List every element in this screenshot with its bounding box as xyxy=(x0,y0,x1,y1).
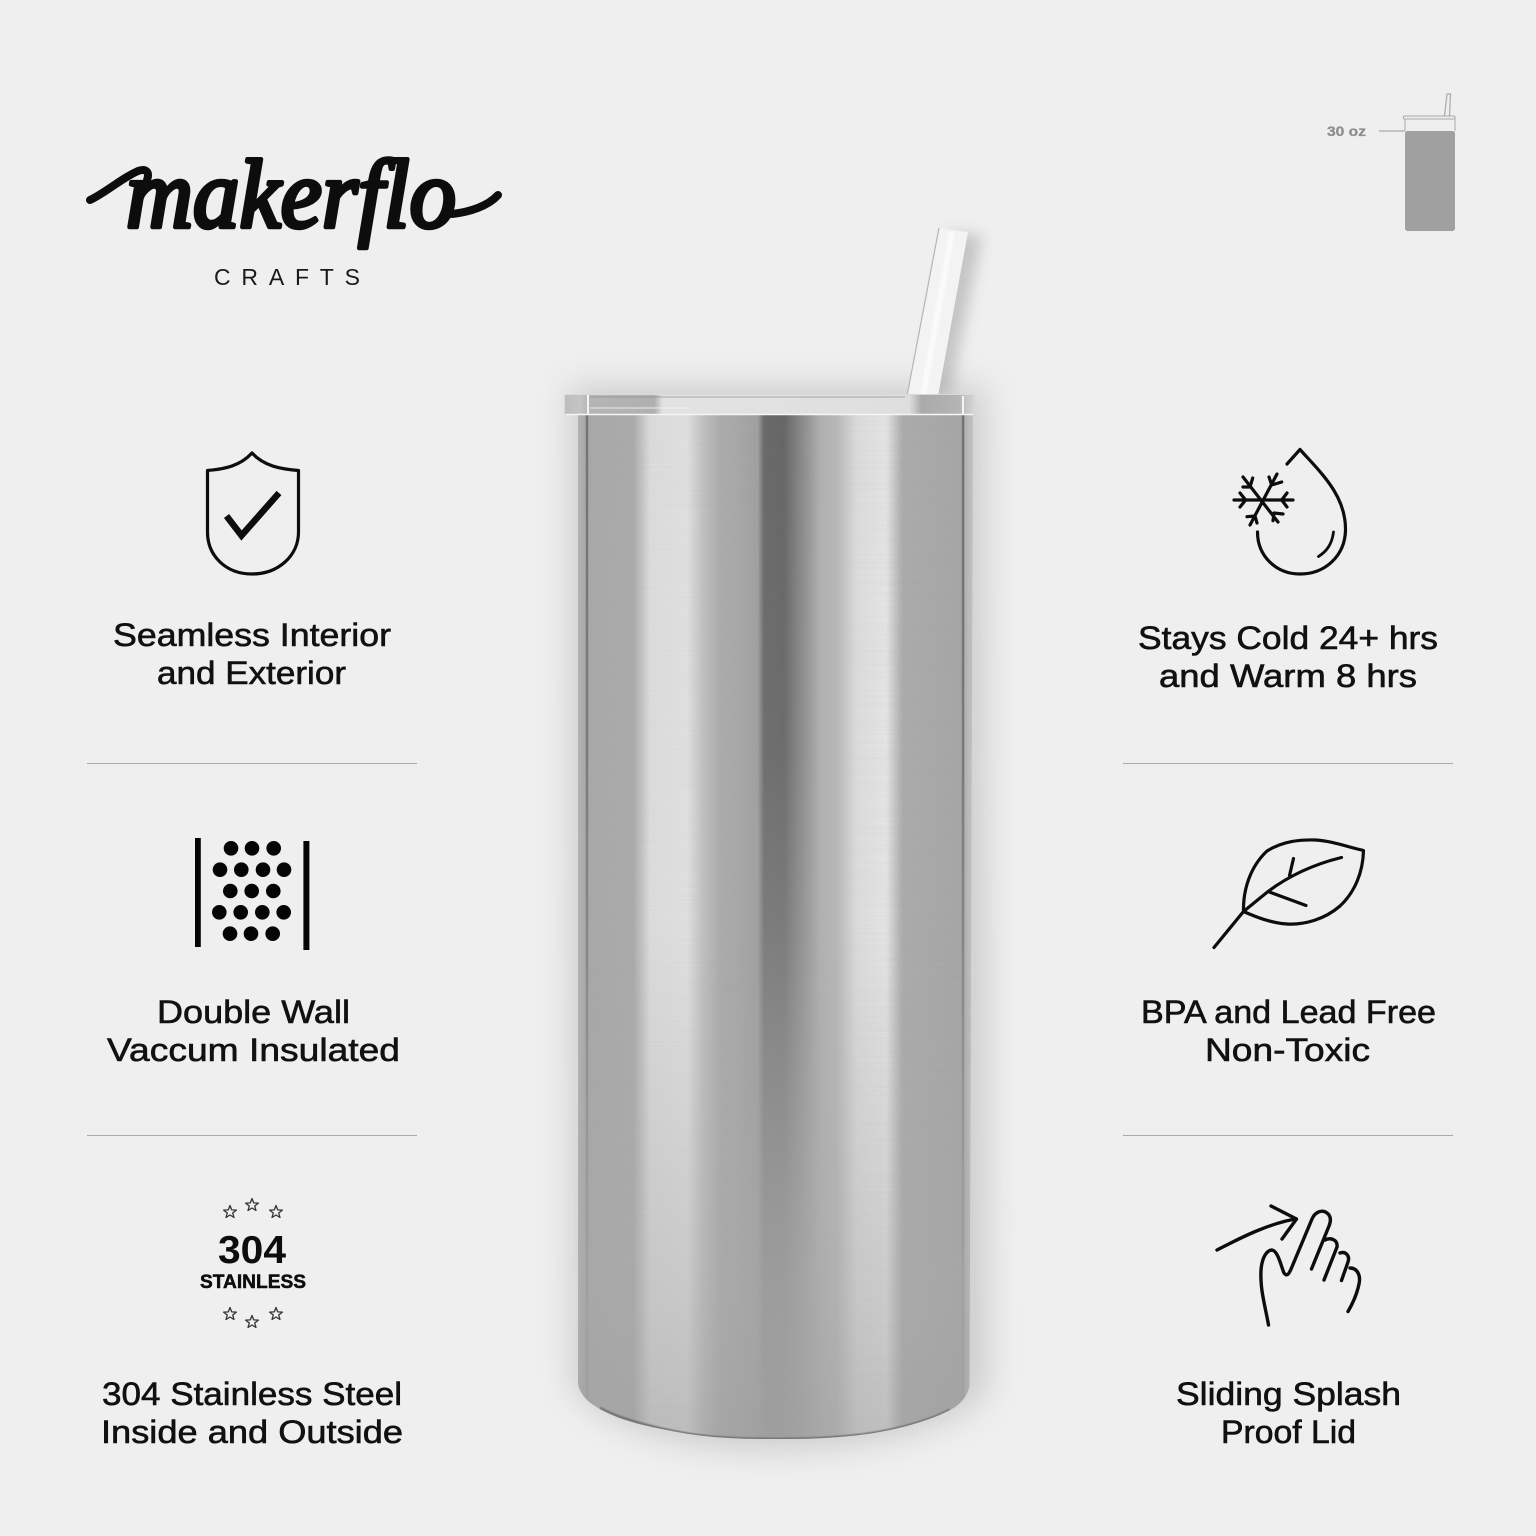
feature: sliding lid xyxy=(1176,1206,1401,1450)
feature text: Double Wall xyxy=(157,994,350,1030)
feature text: BPA and Lead Free xyxy=(1141,994,1436,1030)
feature text: Seamless Interior xyxy=(113,617,391,653)
feature: seamless xyxy=(113,453,391,691)
size label: 30 oz xyxy=(1327,123,1366,139)
feature text: and Warm 8 hrs xyxy=(1159,658,1417,694)
icon: 304 stainless badge xyxy=(200,1198,306,1328)
icon: snowflake drop xyxy=(1234,450,1346,574)
feature: double wall xyxy=(107,838,400,1068)
logo subtitle: CRAFTS xyxy=(214,264,360,290)
icon: swipe hand xyxy=(1217,1206,1360,1325)
tumbler photo xyxy=(564,228,988,1450)
logo: makerflo crafts xyxy=(90,141,498,290)
tumbler lid xyxy=(564,394,975,415)
icon: shield check xyxy=(208,453,298,574)
feature text: Inside and Outside xyxy=(101,1414,403,1450)
feature text: Sliding Splash xyxy=(1176,1376,1401,1412)
icon: 304 stainless badge: STAINLESS xyxy=(200,1272,306,1293)
size tumbler icon xyxy=(1404,94,1455,231)
straw xyxy=(907,228,968,396)
size guide: 30 oz xyxy=(1327,94,1455,231)
feature: 304 stainless xyxy=(101,1198,403,1450)
logo swashes xyxy=(90,170,498,214)
feature text: Vaccum Insulated xyxy=(107,1032,400,1068)
icon: vacuum wall xyxy=(195,838,309,950)
tumbler body xyxy=(575,412,980,1445)
feature text: Non-Toxic xyxy=(1205,1032,1370,1068)
icon: leaf xyxy=(1214,840,1364,948)
feature: bpa free xyxy=(1141,840,1436,1068)
feature text: 304 Stainless Steel xyxy=(102,1376,402,1412)
feature: stays cold xyxy=(1138,450,1438,694)
feature text: Proof Lid xyxy=(1221,1414,1356,1450)
tumbler shadow xyxy=(570,386,988,1450)
icon: 304 stainless badge: 304 xyxy=(218,1229,286,1272)
feature text: Stays Cold 24+ hrs xyxy=(1138,620,1438,656)
straw shadow xyxy=(920,232,982,395)
feature text: and Exterior xyxy=(157,655,346,691)
logo wordmark: makerflo xyxy=(126,141,456,249)
